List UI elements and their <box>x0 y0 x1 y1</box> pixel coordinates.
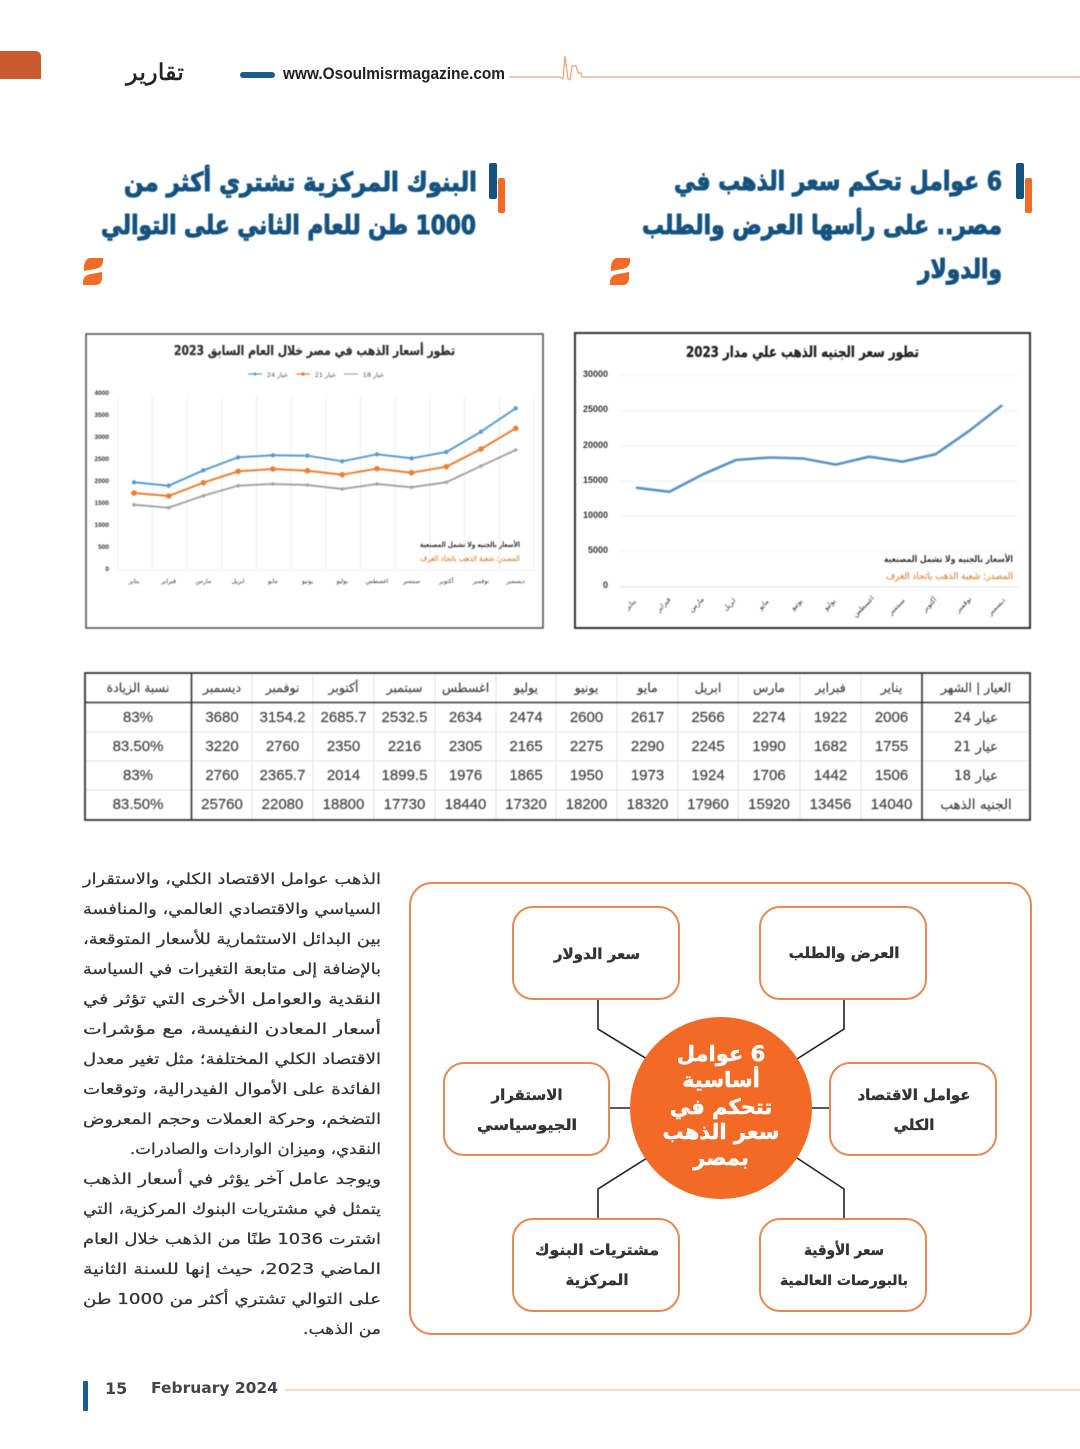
table row: gold pound: 17320 <box>505 796 547 813</box>
factor: supply and demand: العرض والطلب <box>789 944 899 962</box>
page footer <box>83 1379 1080 1411</box>
table row: karat 18: 83% <box>123 767 153 784</box>
table grid <box>85 673 1030 820</box>
page header <box>0 51 1080 86</box>
panel: six factors diagram <box>410 883 1031 1334</box>
table row: gold pound: 25760 <box>201 796 243 813</box>
y axis labels: 1000 <box>95 522 109 529</box>
table row: karat 21: 2275 <box>570 738 603 755</box>
body text column: على التوالي تشتري أكثر من 1000 طن <box>83 1289 381 1309</box>
table header row: أكتوبر <box>327 679 359 696</box>
heading text: 6 عوامل تحكم سعر الذهب في <box>674 167 1002 197</box>
table row: karat 24: 2006 <box>875 709 908 726</box>
y axis labels: 3500 <box>95 412 109 419</box>
month labels: اغسطس <box>851 594 876 619</box>
factor: ounce price <box>760 1219 926 1311</box>
body text column: من الذهب. <box>303 1320 381 1338</box>
table row: gold pound: 18800 <box>323 796 364 813</box>
factor: macroeconomic factors: الكلي <box>894 1116 934 1134</box>
month labels: مارس <box>687 595 706 614</box>
month labels: فبراير <box>160 578 176 585</box>
table header row: يونيو <box>574 680 599 696</box>
table row: karat 21: 1755 <box>875 738 908 755</box>
chart source note: الأسعار بالجنيه ولا تشمل المصنعية <box>884 553 1013 565</box>
table row: karat 24: عيار 24 <box>954 710 998 726</box>
series: karat 21 <box>131 426 518 499</box>
body text column: النقدية والعوامل الأخرى التي تؤثر في <box>83 989 381 1009</box>
body text column: السياسي والاقتصادي العالمي، والمنافسة <box>83 900 381 919</box>
factor: supply and demand <box>760 907 926 999</box>
table row: karat 24: 2600 <box>570 709 603 726</box>
factor: central bank purchases <box>513 1219 679 1311</box>
body text column: اشترت 1036 طنًا من الذهب خلال العام <box>83 1230 381 1248</box>
table row: karat 18: 2760 <box>205 767 239 784</box>
heading: central banks <box>83 163 505 285</box>
y axis labels: 500 <box>98 544 109 551</box>
legend <box>248 371 384 379</box>
month labels <box>623 594 1007 619</box>
month labels: نوفمبر <box>472 578 489 585</box>
footer blue bar <box>83 1381 88 1411</box>
footer rule <box>285 1389 1080 1391</box>
pulse line <box>509 56 1080 80</box>
y axis labels: 4000 <box>95 390 109 397</box>
chart source note <box>884 553 1013 582</box>
table row: karat 21: عيار 21 <box>954 739 998 755</box>
body text column: الذهب عوامل الاقتصاد الكلي، والاستقرار <box>82 870 381 889</box>
legend: عيار 21 <box>315 371 336 379</box>
table header row: نوفمبر <box>265 680 299 696</box>
table row: karat 21: 2245 <box>691 738 725 755</box>
table row: karat 21: 2290 <box>631 738 664 755</box>
section label: تقارير <box>125 60 184 86</box>
orange corner tab <box>0 51 41 79</box>
table row: karat 24: 1922 <box>814 709 847 726</box>
y axis labels <box>583 369 608 590</box>
table row: gold pound <box>113 796 1012 813</box>
month labels <box>128 577 525 585</box>
body text column: الاقتصاد الكلي المختلفة؛ مثل تغير معدل <box>83 1050 381 1069</box>
month labels: ابريل <box>721 596 738 613</box>
body text column: يتمثل في مشتريات البنوك المركزية، التي <box>83 1200 381 1219</box>
factor: central bank purchases: المركزية <box>566 1271 628 1289</box>
y axis labels: 0 <box>603 580 608 590</box>
table row: karat 24: 3680 <box>205 709 239 726</box>
heading text <box>642 167 1002 285</box>
table row: karat 18: 1976 <box>449 767 482 784</box>
price table <box>85 673 1030 820</box>
chart title: تطور أسعار الذهب في مصر خلال العام السابق 2023 <box>174 342 455 359</box>
month labels: ابريل <box>232 578 245 585</box>
month labels: يونيو <box>301 578 314 585</box>
body text column: الماضي 2023، حيث إنها للسنة الثانية <box>83 1260 381 1279</box>
table row: karat 18: 1950 <box>570 767 603 784</box>
table row: karat 21: 2305 <box>449 738 482 755</box>
body text column: النقدي، وميزان الواردات والصادرات. <box>130 1140 381 1159</box>
factor: ounce price: بالبورصات العالمية <box>780 1273 908 1289</box>
website url: www.Osoulmisrmagazine.com <box>282 64 505 83</box>
month labels: نوفمبر <box>953 595 973 615</box>
y axis labels: 3000 <box>95 434 109 441</box>
line chart: gold prices by karat <box>86 334 543 628</box>
month labels: ديسمبر <box>986 596 1007 618</box>
heading text: والدولار <box>916 255 1002 285</box>
factor: macroeconomic factors <box>830 1063 996 1155</box>
y axis labels: 15000 <box>583 475 608 485</box>
table row: karat 21: 3220 <box>205 738 239 755</box>
month labels: فبراير <box>654 596 672 614</box>
body text column: بين البدائل الاستثمارية للأسعار المتوقعة، <box>83 929 381 948</box>
table header row: اغسطس <box>442 680 489 696</box>
table row: karat 18: 1706 <box>752 767 786 784</box>
heading text: 1000 طن للعام الثاني على التوالي <box>101 211 476 241</box>
legend: عيار 24 <box>267 371 288 379</box>
heading: six factors <box>610 163 1032 285</box>
table row: karat 24: 83% <box>123 709 153 726</box>
heading text <box>101 165 477 241</box>
heading text: البنوك المركزية تشتري أكثر من <box>124 165 477 198</box>
chart source note <box>420 540 520 563</box>
center circle: 6 عوامل <box>677 1042 765 1066</box>
y axis labels: 1500 <box>95 500 109 507</box>
center circle: تتحكم في <box>670 1095 772 1119</box>
table header row: مارس <box>753 680 785 696</box>
table row: karat 18: 1506 <box>875 767 908 784</box>
heading accent bars <box>1016 163 1032 213</box>
chart source note: المصدر: شعبة الذهب باتحاد الغرف <box>886 572 1013 582</box>
factor: geopolitical stability <box>444 1063 609 1155</box>
body text column: ويوجد عامل آخر يؤثر في أسعار الذهب <box>83 1169 381 1189</box>
y axis labels: 0 <box>105 566 109 573</box>
y axis labels: 10000 <box>583 510 608 520</box>
table header row: فبراير <box>814 680 846 696</box>
table row: gold pound: 18320 <box>627 796 668 813</box>
table row: karat 21: 2350 <box>327 738 360 755</box>
table row: gold pound: 17730 <box>384 796 425 813</box>
table row: gold pound: 14040 <box>871 796 912 813</box>
icon: orange leaf <box>610 258 630 285</box>
heading text: مصر.. على رأسها العرض والطلب <box>642 208 1002 241</box>
y axis labels: 30000 <box>583 369 608 379</box>
connector lines <box>598 999 844 1219</box>
body text column: بالإضافة إلى متابعة التغيرات في السياسة <box>83 960 381 979</box>
month labels: ديسمبر <box>506 578 525 585</box>
month labels: اغسطس <box>366 578 389 585</box>
month labels: سبتمبر <box>886 597 907 617</box>
legend: عيار 18 <box>363 371 384 379</box>
table header row: ديسمبر <box>202 680 241 696</box>
table header row <box>107 679 1011 696</box>
table row: karat 18 <box>123 767 998 784</box>
series: gold pound <box>636 405 1002 492</box>
y axis labels: 2000 <box>95 478 109 485</box>
horizontal gridlines <box>620 376 1018 552</box>
table row: karat 21: 2165 <box>509 738 543 755</box>
month labels: يونيو <box>788 597 804 613</box>
factor: central bank purchases: مشتريات البنوك <box>535 1241 659 1259</box>
table header row: يناير <box>880 680 903 696</box>
chart source note: المصدر: شعبة الذهب باتحاد الغرف <box>420 554 520 563</box>
blue dash <box>240 72 275 78</box>
table header row: نسبة الزيادة <box>107 680 169 696</box>
center circle: سعر الذهب <box>663 1120 779 1144</box>
month labels: أكتوبر <box>919 595 938 614</box>
factor: geopolitical stability: الاستقرار <box>490 1086 563 1104</box>
month labels: مايو <box>267 578 278 585</box>
table row: gold pound: 18200 <box>566 796 607 813</box>
table header row: يوليو <box>513 680 539 696</box>
month labels: يوليو <box>335 578 348 585</box>
center circle <box>630 1017 812 1199</box>
table row: karat 24: 2617 <box>631 709 664 726</box>
table row: karat 18: 1899.5 <box>382 767 427 784</box>
factor: dollar price <box>513 907 679 999</box>
table row: gold pound: 22080 <box>262 796 303 813</box>
table row: gold pound: 83.50% <box>113 796 163 813</box>
body text column <box>82 870 381 1338</box>
month labels: سبتمبر <box>402 578 420 585</box>
y axis labels: 20000 <box>583 440 608 450</box>
table row: karat 24: 2274 <box>752 709 786 726</box>
issue date: February 2024 <box>151 1379 278 1397</box>
table row: karat 21: 1990 <box>752 738 786 755</box>
factor: macroeconomic factors: عوامل الاقتصاد <box>857 1086 971 1104</box>
center circle: أساسية <box>682 1065 760 1092</box>
y axis labels: 2500 <box>95 456 109 463</box>
table row: gold pound: 18440 <box>445 796 486 813</box>
page number: 15 <box>105 1379 127 1398</box>
y axis labels <box>95 390 109 573</box>
table row: karat 18: 1865 <box>509 767 543 784</box>
month labels: يوليو <box>821 597 837 613</box>
table row: karat 21: 1682 <box>814 738 847 755</box>
table row: karat 21 <box>113 738 998 755</box>
factor: dollar price: سعر الدولار <box>553 945 640 963</box>
month labels: أكتوبر <box>438 577 454 585</box>
table row: karat 24: 2634 <box>449 709 482 726</box>
month labels: يناير <box>128 578 139 585</box>
body text column: الفائدة على الأموال الفيدرالية، وتوقعات <box>83 1079 381 1098</box>
table row: karat 24: 2532.5 <box>382 709 427 726</box>
body text column: أسعار المعادن النفيسة، مع مؤشرات <box>83 1019 381 1038</box>
icon: orange leaf <box>83 258 103 285</box>
table row: gold pound: 17960 <box>687 796 729 813</box>
series: karat 24 <box>132 406 518 488</box>
table row: gold pound: الجنيه الذهب <box>940 797 1012 813</box>
table row: karat 18: 1442 <box>814 767 847 784</box>
y axis labels: 25000 <box>583 404 608 414</box>
vertical gridlines <box>118 395 534 570</box>
table row: karat 21: 2216 <box>388 738 421 755</box>
table row: karat 18: 1973 <box>631 767 664 784</box>
table row: karat 24: 2474 <box>509 709 543 726</box>
table row: karat 21: 83.50% <box>113 738 163 755</box>
table row: karat 18: 2014 <box>327 767 360 784</box>
center circle: بمصر <box>692 1146 749 1170</box>
table row: karat 24 <box>123 709 998 726</box>
heading accent bars <box>489 163 505 213</box>
table row: gold pound: 13456 <box>810 796 851 813</box>
body text column: التضخم، وحركة العملات وحجم المعروض <box>83 1110 381 1128</box>
table row: karat 24: 3154.2 <box>260 709 305 726</box>
month labels: مارس <box>196 578 211 585</box>
chart source note: الأسعار بالجنيه ولا تشمل المصنعية <box>420 540 520 549</box>
table row: karat 24: 2566 <box>691 709 725 726</box>
table row: gold pound: 15920 <box>748 796 790 813</box>
table row: karat 24: 2685.7 <box>321 709 366 726</box>
chart title: تطور سعر الجنيه الذهب علي مدار 2023 <box>686 343 919 361</box>
table row: karat 18: 1924 <box>691 767 725 784</box>
table header row: مايو <box>636 680 658 696</box>
month labels: مايو <box>756 598 771 612</box>
table header row: سبتمبر <box>386 680 422 696</box>
factor: ounce price: سعر الأوقية <box>804 1241 884 1259</box>
table row: karat 21: 2760 <box>266 738 299 755</box>
table header row: ابريل <box>695 680 721 696</box>
series: karat 18 <box>132 448 517 510</box>
table header row: العيار | الشهر <box>940 680 1011 696</box>
table row: karat 18: عيار 18 <box>954 768 998 784</box>
month labels: يناير <box>623 597 638 612</box>
factor: geopolitical stability: الجيوسياسي <box>477 1116 577 1134</box>
y axis labels: 5000 <box>588 545 608 555</box>
table row: karat 18: 2365.7 <box>260 767 305 784</box>
line chart: gold pound price <box>575 333 1030 628</box>
